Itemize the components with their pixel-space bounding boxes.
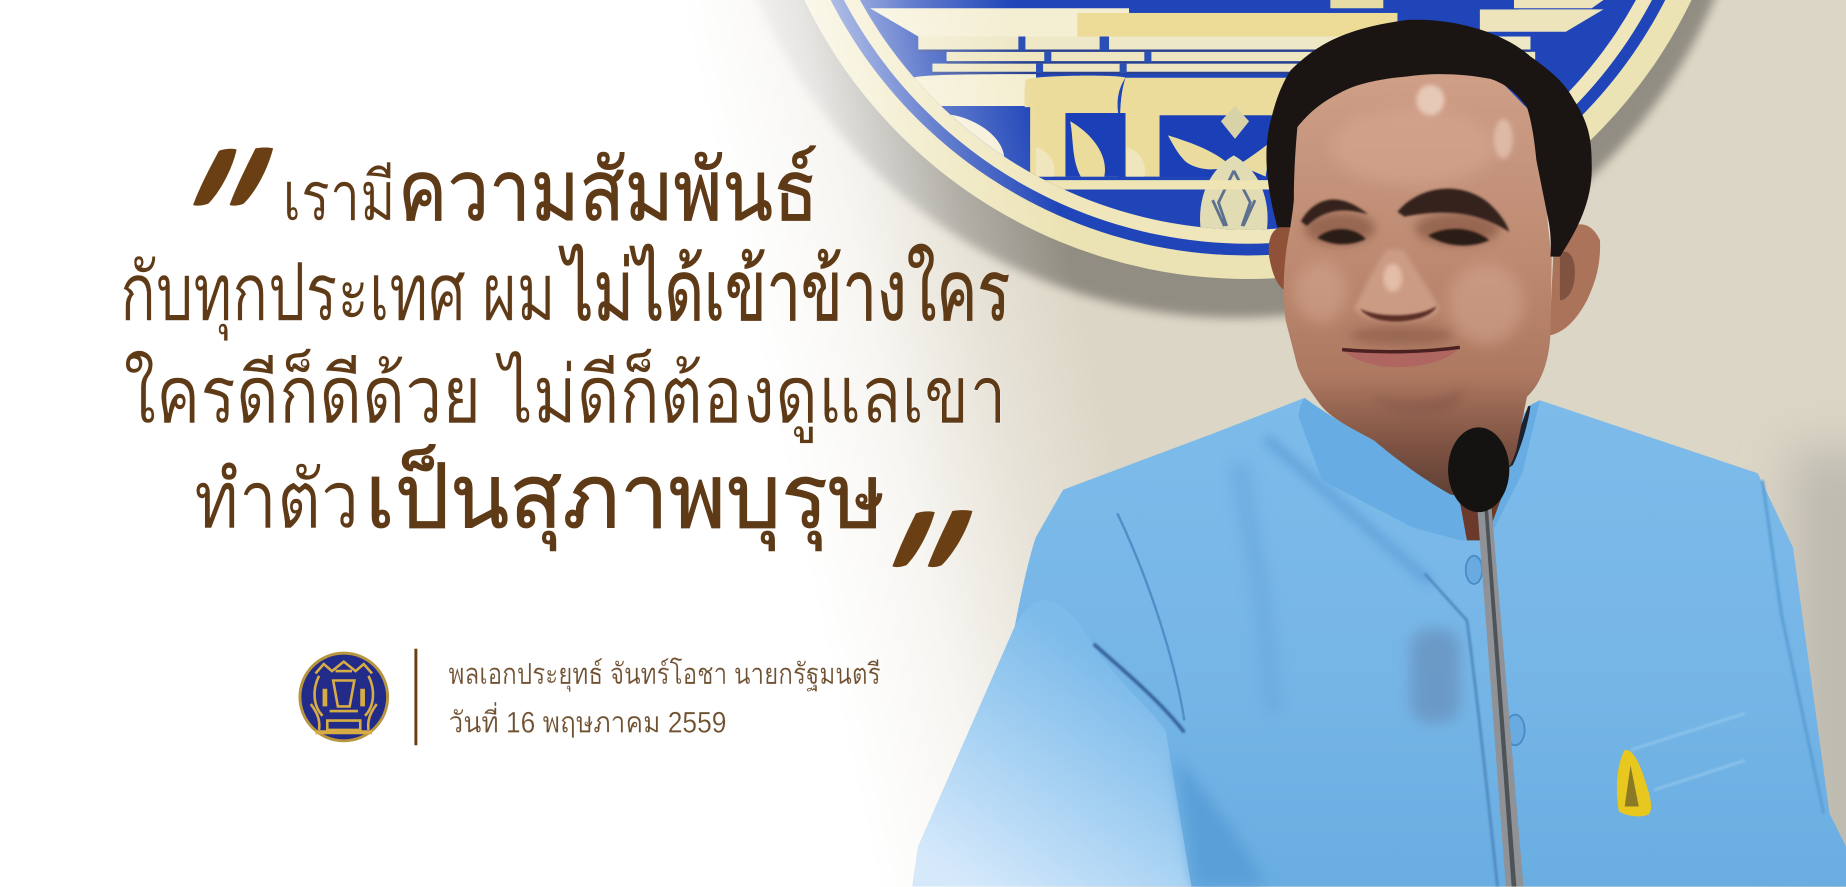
collar <box>1299 398 1540 540</box>
gold elephant right <box>1120 78 1295 177</box>
small gold curls <box>1036 147 1145 177</box>
blue panel middle <box>1065 113 1125 177</box>
left sleeve <box>912 600 1191 887</box>
quote text: ไม่ได้เข้าข้างใคร <box>558 243 1010 338</box>
sleeve seam <box>1117 513 1184 721</box>
gold elephant left <box>1025 76 1125 177</box>
date: วันที่ 16 พฤษภาคม 2559 <box>449 701 726 739</box>
blue panel left <box>942 107 1030 172</box>
microphone stand shade <box>1483 494 1516 887</box>
chin shade <box>1372 389 1466 416</box>
opening quote mark <box>193 147 273 206</box>
pale top of elephant base <box>914 74 1036 106</box>
quote text: เป็นสุภาพบุรุษ <box>365 443 885 550</box>
eye sockets <box>1304 212 1500 245</box>
middle leaf ornament <box>1070 121 1105 177</box>
wings ornament <box>1168 135 1271 177</box>
divider <box>414 649 417 745</box>
quote text <box>120 143 1010 567</box>
government emblem on wall <box>756 0 1740 279</box>
blue panel right <box>1160 115 1272 176</box>
left leaf ornament <box>950 114 1004 156</box>
microphone stand <box>1476 494 1523 887</box>
ears <box>1269 224 1600 336</box>
chest vertical fold <box>1239 464 1274 713</box>
face highlights <box>1295 109 1523 344</box>
diamond ornament <box>1221 106 1249 139</box>
placket <box>1425 573 1498 887</box>
chest shadow <box>1410 629 1460 723</box>
photo: speaker <box>912 20 1846 887</box>
sleeve underside shade <box>1175 753 1266 887</box>
nose underside <box>1360 306 1436 322</box>
attribution <box>449 657 881 739</box>
mouth <box>1342 347 1460 367</box>
line 4: ทำตัว <box>194 455 359 544</box>
closing quote mark <box>892 510 972 567</box>
arm crease <box>1094 644 1184 732</box>
forehead shine <box>1416 85 1513 159</box>
top pale steps <box>870 8 1129 36</box>
neck under microphone <box>1457 483 1507 540</box>
seal of the prime minister's office <box>298 652 389 742</box>
nose <box>1354 250 1440 322</box>
horizontal stripes <box>918 36 1530 49</box>
hair <box>1266 20 1592 257</box>
right sleeve seam <box>1762 480 1824 814</box>
face <box>1284 69 1552 496</box>
line 1: เรามี <box>283 159 396 235</box>
cream strip <box>1045 180 1270 190</box>
speaker name: พลเอกประยุทธ์ จันทร์โอชา นายกรัฐมนตรี <box>449 657 881 692</box>
shirt body <box>912 398 1846 887</box>
nose highlight <box>1383 264 1402 292</box>
wall grey tone at right <box>1789 447 1846 887</box>
shirt buttons <box>1466 556 1525 745</box>
microphone head <box>1448 427 1509 512</box>
line 2: กับทุกประเทศ ผม <box>120 248 556 341</box>
pocket seams <box>1631 713 1745 790</box>
eyes <box>1317 229 1489 245</box>
shoulder fold <box>1266 438 1430 583</box>
line 3: ใครดีก็ดีด้วย ไม่ดีก็ต้องดูแลเขา <box>124 348 1007 444</box>
dark gap beside neck <box>1505 406 1530 471</box>
royal pin <box>1617 750 1651 816</box>
quote text: ความสัมพันธ์ <box>398 143 818 238</box>
lotus ornament <box>1200 155 1268 231</box>
philtrum shade <box>1349 326 1453 345</box>
eyebrows <box>1301 189 1509 232</box>
emblem shadow <box>718 0 1754 318</box>
